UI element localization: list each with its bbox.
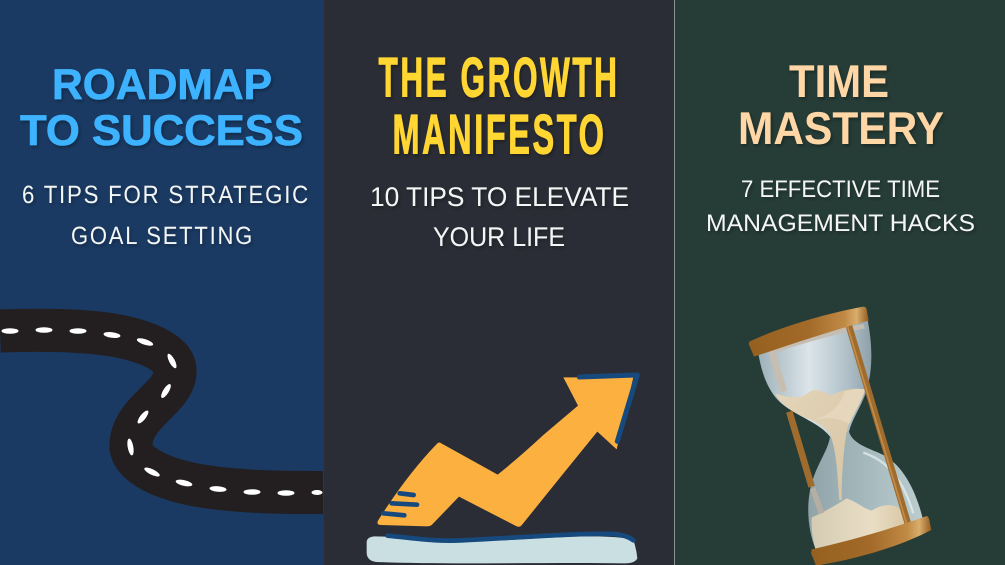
text: growth subtitle: 10 TIPS TO ELEVATE (370, 182, 629, 212)
panel: growth background (324, 0, 675, 565)
panel: roadmap background (0, 0, 324, 565)
upper glass (758, 320, 871, 437)
back rod (772, 352, 784, 392)
text: growth subtitle: YOUR LIFE (433, 222, 565, 252)
text: time subtitle: 7 EFFECTIVE TIME (741, 176, 940, 203)
rim shadow (767, 324, 865, 353)
heading: roadmap to success: ROADMAP (52, 61, 272, 109)
heading: the growth manifesto (378, 46, 620, 166)
arrow body (377, 377, 633, 527)
text: roadmap subtitle (22, 181, 310, 250)
icon: winding road (0, 327, 323, 496)
front rod (848, 323, 909, 527)
top cap (749, 307, 869, 357)
heading: roadmap to success (20, 61, 303, 155)
base platform (367, 536, 637, 563)
upper sand (775, 389, 865, 500)
icon: hourglass (749, 307, 931, 565)
heading: the growth manifesto: THE GROWTH (378, 46, 620, 108)
text: roadmap subtitle: GOAL SETTING (71, 222, 254, 250)
lower glass (808, 432, 923, 550)
heading: time mastery (738, 55, 944, 154)
panel: time background (675, 0, 1005, 565)
text: roadmap subtitle: 6 TIPS FOR STRATEGIC (22, 181, 310, 209)
text: growth subtitle (370, 182, 629, 252)
lower sand (812, 498, 912, 551)
arrow accents (383, 375, 637, 515)
text: time subtitle (706, 176, 975, 237)
heading: roadmap to success: TO SUCCESS (20, 107, 303, 155)
bottom cap (811, 516, 931, 565)
heading: the growth manifesto: MANIFESTO (392, 102, 606, 166)
heading: time mastery: TIME (789, 55, 889, 107)
heading: time mastery: MASTERY (738, 102, 944, 154)
text: time subtitle: MANAGEMENT HACKS (706, 210, 975, 237)
icon: rising arrow on base (367, 375, 637, 563)
